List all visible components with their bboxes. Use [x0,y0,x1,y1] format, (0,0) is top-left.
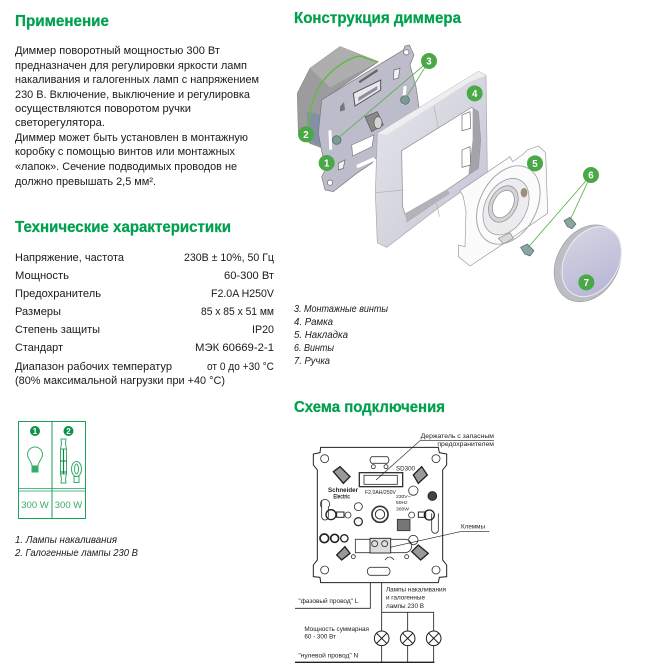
icon: incandescent bulb [28,447,43,472]
text block: description: накаливания и галогенных ламп с напряжением [15,74,259,86]
device labels [328,465,415,512]
table: specification rows: Диапазон рабочих температур [15,361,172,373]
caption: construction parts: 4. Рамка [294,316,333,328]
heading: wiring diagram: Схема подключения [294,399,445,416]
device labels: SD300 [396,465,415,472]
device labels: F2.0AH/250V [365,490,396,496]
wiring labels: Мощность суммарная [304,626,369,633]
text block: description [15,45,259,188]
text block: description: осуществляются поворотом ручки [15,103,191,115]
callout 1: 1 [324,159,330,170]
plate details [320,455,440,575]
wiring labels: Лампы накаливания [386,586,446,593]
table: specification rows: от 0 до +30 °C [207,361,274,373]
shaft [365,112,383,132]
panel: lamp types table [14,421,138,559]
wiring labels [298,586,446,660]
table: specification rows: 60-300 Вт [224,270,274,282]
text block: description: Диммер поворотный мощностью 300 Вт [15,45,220,57]
annotation: fuse holder [376,433,494,480]
annotation: fuse holder: предохранителем [437,441,494,448]
wiring labels: и галогенные [386,594,425,601]
table: specification rows: Размеры [15,306,61,318]
device labels: Schneider [328,488,359,494]
text block: description: Диммер может быть установлен в монтажную [15,132,248,144]
caption: construction parts: 6. Винты [294,342,334,354]
wires [295,583,434,662]
callout 7 [578,274,594,290]
table frame [18,421,86,518]
callout 2: 2 [303,130,309,141]
table: specification rows: Напряжение, частота [15,252,125,264]
caption: construction parts: 7. Ручка [294,355,330,367]
device labels: Electric [333,495,351,501]
table: specification rows: IP20 [252,324,274,336]
table: specification rows: Степень защиты [15,324,100,336]
annotation: terminals [390,523,489,547]
device labels: 230V~ [396,494,411,500]
annotation: terminals: Клеммы [461,523,485,530]
heading: dimmer construction: Конструкция диммера [294,10,461,27]
callout 6: 6 [588,171,594,182]
callout 4 [467,85,483,101]
callout 5 [527,155,543,171]
caption: construction parts: 5. Накладка [294,329,348,341]
callout 3: 3 [426,57,432,68]
heading: specifications: Технические характеристики [15,219,231,236]
table: specification rows: (80% максимальной нагрузки при +40 °C) [15,375,225,387]
mechanism box [297,47,378,148]
text block: description: 230 В. Включение, выключение и регулировка [15,89,251,101]
callout 3 [421,53,437,69]
table: specification rows: 230В ± 10%, 50 Гц [184,252,275,264]
table: specification rows: 85 x 85 x 51 мм [201,306,274,318]
text block: description: должно превышать 2,5 мм². [15,176,156,188]
device labels: 50Hz [396,500,408,506]
caption: lamp types: 1. Лампы накаливания [15,534,117,546]
table: specification rows: МЭК 60669-2-1 [195,342,274,354]
text block: description: светорегулятора. [15,117,105,129]
text block: description: коробку с помощью винтов или монтажных [15,146,235,158]
leader lines [337,61,591,248]
table: specification rows: Стандарт [15,342,63,354]
wiring labels: лампы 230 В [386,603,425,610]
cover plate [458,146,553,266]
device labels: 300W [396,506,409,512]
panel: technical specifications [15,219,275,387]
lamp symbols [374,631,441,646]
panel: wiring diagram [295,433,494,662]
table: specification rows: Мощность [15,270,69,282]
terminal clips [320,467,437,560]
caption: construction parts [294,303,388,367]
heading: application: Применение [15,13,109,30]
caption: lamp types [14,534,138,559]
label: 300 W right: 300 W [55,500,82,511]
badge: 1: 1 [33,427,38,436]
label: 300 W left: 300 W [21,500,49,511]
screws on plate [332,96,409,144]
caption: lamp types: 2. Галогенные лампы 230 В [14,547,138,559]
wiring labels: "нулевой провод" N [298,652,359,660]
callout 1 [319,155,335,171]
callout 7: 7 [584,278,589,289]
panel: exploded view [297,45,635,314]
dimmer plate outline [313,447,447,583]
callout 5: 5 [532,159,538,170]
panel: application [15,13,259,188]
text block: description: «лапок». Сечение подводимых проводов не [15,161,237,173]
callout 4: 4 [472,89,478,100]
callout 6 [583,167,599,183]
icon: capsule halogen lamp [72,462,82,482]
table: specification rows: F2.0A H250V [211,288,275,300]
frame [375,71,487,247]
mounting plate [318,45,419,192]
annotation: fuse holder: Держатель с запасным [421,433,494,440]
table: specification rows: Предохранитель [15,288,101,300]
text block: description: предназначен для регулировки яркости ламп [15,60,247,72]
wiring labels: "фазовый провод" L [298,597,359,605]
knob [541,213,635,314]
wiring labels: 60 - 300 Вт [304,633,336,640]
caption: construction parts: 3. Монтажные винты [294,303,388,315]
icon: linear halogen lamp [60,439,67,483]
callout 2 [298,126,314,142]
table: specification rows [15,252,275,387]
badge: 2: 2 [66,427,71,436]
screws loose [521,217,576,256]
